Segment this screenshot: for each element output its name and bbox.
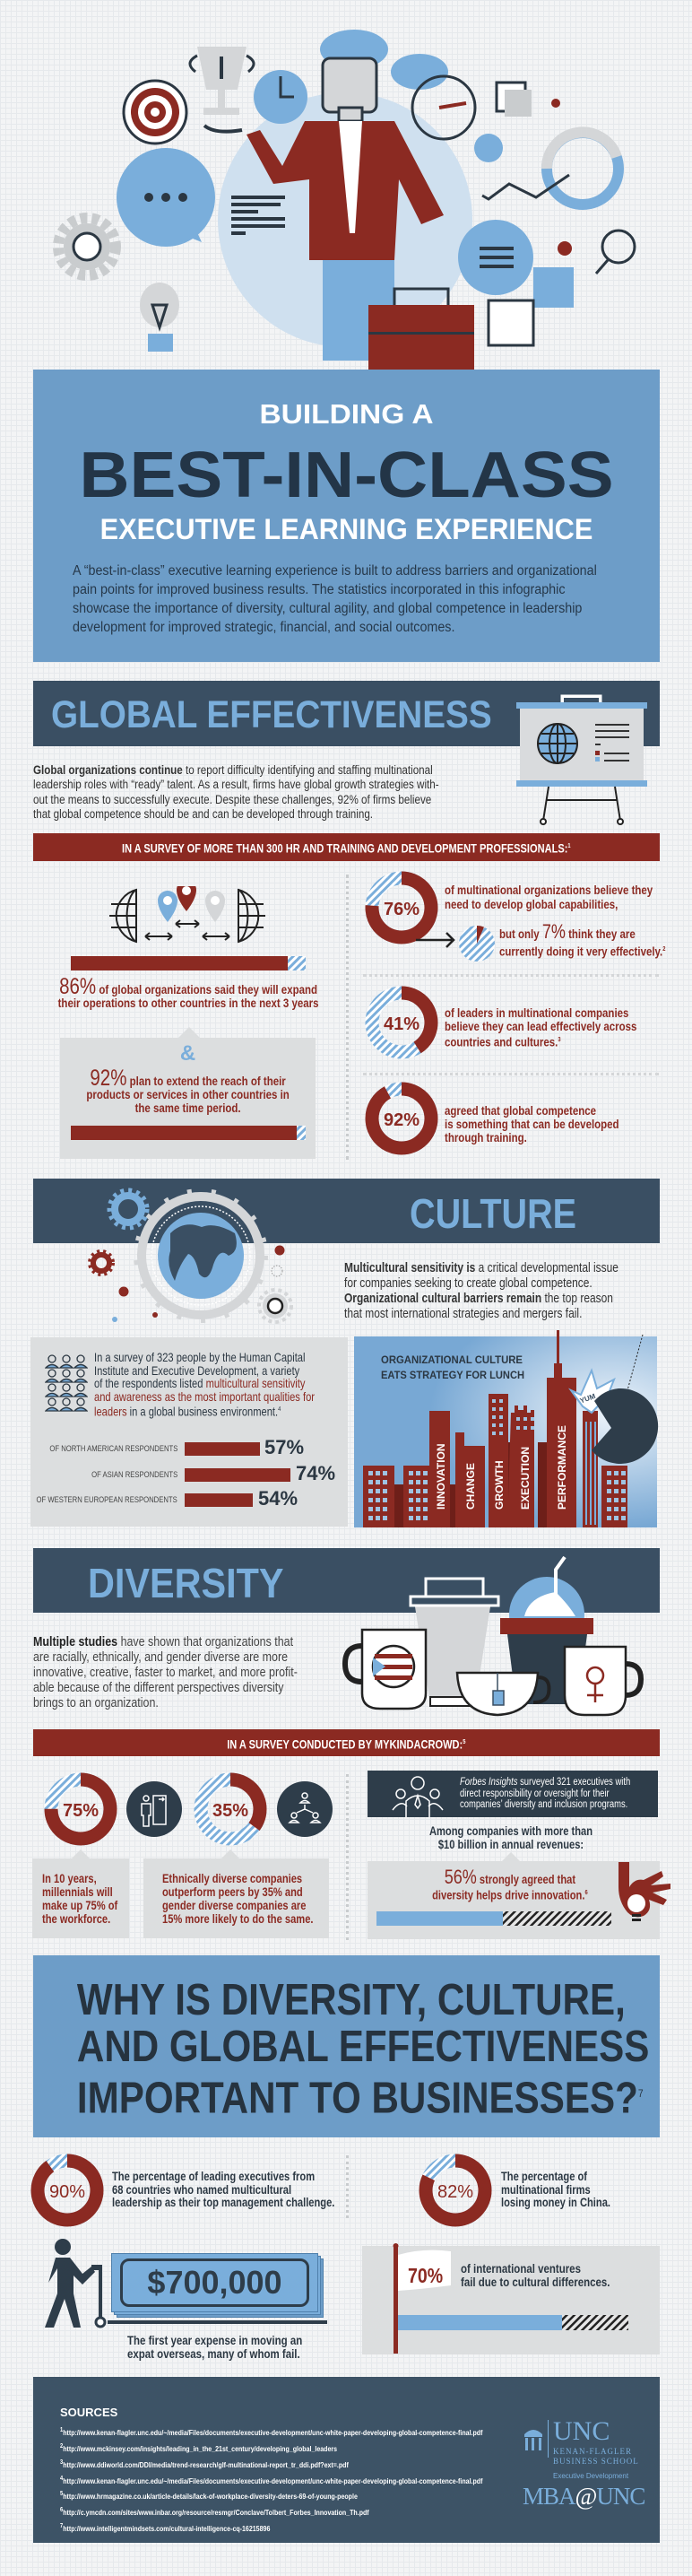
icon: donut chart [474, 132, 618, 205]
money bill [111, 2253, 324, 2318]
header: culture: CULTURE [410, 1190, 576, 1237]
icon: network people [277, 1781, 333, 1837]
panel: 70% ventures: 70% [408, 2264, 443, 2287]
bar chart: respondents [36, 1436, 335, 1510]
stat text: 90%: The percentage of leading executives from [112, 2170, 315, 2183]
panel: sources: 3http://www.ddiworld.com/DDI/media/trend-research/glf-multinational-report_tr_ddi.pdf?ext=.pdf [60, 2459, 349, 2469]
donut: 35%: 35% [212, 1801, 248, 1821]
callout: 92% plan: & [180, 1041, 195, 1066]
panel: forbes insights [368, 1771, 658, 1817]
panel: 56%: diversity helps drive innovation.6 [432, 1889, 588, 1902]
caption: first year expense [127, 2333, 302, 2361]
donut: 35% [194, 1772, 267, 1846]
bar chart: respondents: 74% [296, 1462, 335, 1484]
survey text: leaders in a global business environment.4 [94, 1405, 281, 1419]
donut: 82%: 82% [437, 2182, 473, 2202]
culture intro text: that most international strategies and mergers fail. [344, 1307, 582, 1321]
donut: 76%: 76% [384, 900, 420, 919]
intro paragraph: pain points for improved business results. The statistics incorporated in this infographic [73, 582, 565, 597]
panel: culture eats strategy skyline: EXECUTION [519, 1447, 532, 1510]
logo: UNC Kenan-Flagler: UNC [553, 2416, 610, 2446]
stat text: 82% [501, 2170, 610, 2209]
intro paragraph: development for improved strategic, financial, and social outcomes. [73, 620, 454, 635]
panel: sources: SOURCES [60, 2406, 117, 2419]
donut: 41%: 41% [384, 1014, 420, 1034]
bar chart: respondents: OF NORTH AMERICAN RESPONDENTS [49, 1443, 177, 1453]
logo: UNC Kenan-Flagler: KENAN-FLAGLER [553, 2447, 632, 2456]
icon: globes and pins [109, 886, 265, 944]
panel: why question: IMPORTANT TO BUSINESSES?7 [77, 2074, 644, 2122]
header: global effectiveness: GLOBAL EFFECTIVENESS [51, 693, 492, 736]
briefcase [368, 289, 474, 370]
panel: culture eats strategy skyline: EATS STRATEGY FOR LUNCH [381, 1369, 524, 1381]
panel: culture eats strategy skyline: GROWTH [493, 1460, 506, 1510]
donut: 76% [366, 872, 437, 944]
panel: sources: 6http://c.ymcdn.com/sites/www.inbar.org/resource/resmgr/Conclave/Tolbert_Forbes_Innovation_Th.pdf [60, 2507, 369, 2517]
panel: why question: WHY IS DIVERSITY, CULTURE, [77, 1976, 626, 2024]
donut: 82% [420, 2154, 491, 2226]
panel: 70% ventures: fail due to cultural differences. [461, 2275, 610, 2289]
callout: millennials: In 10 years, [42, 1872, 97, 1885]
intro paragraph: showcase the importance of diversity, cultural agility, and global competence in leadership [73, 601, 582, 616]
panel: 70% ventures [362, 2246, 660, 2354]
icon: square [497, 83, 560, 117]
panel: why question [33, 1955, 660, 2137]
culture intro text: Multicultural sensitivity is a critical developmental issue [344, 1261, 618, 1275]
header: global effectiveness [33, 681, 660, 746]
panel: 56%: 56% strongly agreed that [445, 1866, 575, 1888]
stat text: 90% [112, 2170, 334, 2209]
panel: sources: 7http://www.intelligentmindsets.com/cultural-intelligence-cq-16215896 [60, 2523, 270, 2533]
stat text: 92%: through training. [445, 1130, 527, 1144]
survey banner 2 [33, 1729, 660, 1756]
panel: why question: AND GLOBAL EFFECTIVENESS [77, 2023, 649, 2071]
title panel [33, 370, 660, 662]
global effectiveness intro text: leadership roles with “ready” talent. As a result, firms have global growth strategies with- [33, 778, 439, 792]
bar chart: respondents: 57% [264, 1436, 304, 1458]
callout: ethnically diverse: outperform peers by 35% and [162, 1885, 303, 1899]
header: diversity [33, 1548, 660, 1613]
text lines [231, 196, 285, 235]
stat text: 76%: need to develop global capabilities, [445, 897, 618, 911]
callout: millennials [32, 1858, 129, 1938]
title line 1: BUILDING A [259, 398, 434, 430]
global effectiveness intro text [33, 763, 439, 822]
icon: trophy [190, 47, 254, 115]
stat text: 76%: of multinational organizations believe they [445, 883, 653, 897]
stat text: 41%: countries and cultures.3 [445, 1035, 561, 1049]
intro paragraph [73, 563, 597, 635]
stat text: 7%: currently doing it very effectively.2 [499, 944, 665, 959]
stat text: 92%: agreed that global competence [445, 1103, 596, 1118]
survey text [94, 1351, 315, 1419]
caption: first year expense: expat overseas, many of whom fail. [127, 2346, 300, 2361]
panel: culture eats strategy skyline: INNOVATION [435, 1443, 447, 1510]
text: among companies: $10 billion in annual revenues: [438, 1838, 584, 1851]
diversity intro text: are racially, ethnically, and gender diverse are more [33, 1649, 288, 1665]
icon: target [124, 81, 186, 144]
icon: lightbulb [140, 283, 179, 352]
intro paragraph: A “best-in-class” executive learning experience is built to address barriers and organizational [73, 563, 597, 579]
panel: forbes insights: Forbes Insights surveyed 321 executives with [460, 1777, 630, 1788]
callout: millennials: make up 75% of [42, 1899, 117, 1912]
panel: culture eats strategy skyline: YUM [579, 1392, 597, 1405]
donut: 92% [366, 1082, 437, 1155]
callout: ethnically diverse: 15% more likely to do the same. [162, 1912, 314, 1926]
survey banner 2: IN A SURVEY CONDUCTED BY MYKINDACROWD:5 [227, 1738, 465, 1751]
survey text: Institute and Executive Development, a variety [94, 1363, 299, 1378]
header: culture [33, 1179, 660, 1243]
panel: culture eats strategy skyline [354, 1330, 658, 1527]
callout: 92% plan: 92% plan to extend the reach of their products or services in other countries in the same time period. [86, 1066, 290, 1115]
bar chart: respondents: OF ASIAN RESPONDENTS [91, 1469, 177, 1479]
stat text: 41%: believe they can lead effectively across [445, 1019, 636, 1033]
icon: people grid [45, 1354, 88, 1412]
icon: speech bubble lines [458, 220, 533, 295]
stat text: 41%: of leaders in multinational companies [445, 1005, 628, 1020]
panel: sources: 4http://www.kenan-flagler.unc.edu/~/media/Files/documents/executive-development/unc-white-paper-developing-global-competence-final.pdf [60, 2476, 482, 2485]
survey banner 1 [33, 833, 660, 861]
stat text: 90%: leadership as their top management challenge. [112, 2196, 334, 2209]
panel: 70% ventures: of international ventures [461, 2261, 581, 2276]
icon: puzzle [489, 231, 635, 345]
caption: first year expense: The first year expense in moving an [127, 2333, 302, 2347]
icon: person pushing cart [45, 2239, 327, 2328]
icon: person at door [126, 1781, 182, 1837]
callout: millennials: millennials will [42, 1885, 113, 1899]
survey text: of the respondents listed multicultural sensitivity [94, 1377, 305, 1390]
donut: 75%: 75% [63, 1801, 99, 1821]
text: among companies: Among companies with more than [429, 1824, 593, 1838]
callout: ethnically diverse: Ethnically diverse companies [162, 1872, 302, 1885]
text: among companies [429, 1824, 593, 1851]
stat: 86%: 86% of global organizations said they will expand their operations to other countries in the next 3 years [58, 974, 319, 1010]
panel: 56% [368, 1861, 660, 1939]
diversity intro text: Multiple studies have shown that organizations that [33, 1634, 293, 1649]
panel: sources: 2http://www.mckinsey.com/insights/leading_in_the_21st_century/developing_global_leaders [60, 2443, 337, 2453]
survey banner 1: IN A SURVEY OF MORE THAN 300 HR AND TRAINING AND DEVELOPMENT PROFESSIONALS:1 [122, 841, 571, 856]
global effectiveness intro text: out the means to successfully execute. Despite these challenges, 92% of firms believe [33, 793, 431, 807]
survey text: In a survey of 323 people by the Human Capital [94, 1351, 305, 1364]
callout: ethnically diverse [143, 1858, 329, 1938]
stat text: 7% [499, 920, 665, 959]
global effectiveness intro text: Global organizations continue to report difficulty identifying and staffing multinational [33, 763, 433, 778]
icon: easel [516, 694, 647, 825]
diversity intro text: innovative, creative, faster to market, and more profit- [33, 1665, 298, 1680]
culture intro text: Organizational cultural barriers remain the top reason [344, 1292, 613, 1306]
divider dotted [346, 875, 349, 1160]
hero illustration [53, 30, 636, 370]
callout: millennials: the workforce. [42, 1912, 110, 1926]
title main: BEST-IN-CLASS [79, 439, 614, 511]
panel: forbes insights: companies’ diversity and inclusion programs. [460, 1799, 627, 1810]
donut: 92%: 92% [384, 1110, 420, 1130]
global effectiveness intro text: that global competence should be and can be developed through training. [33, 807, 373, 822]
panel: culture eats strategy skyline: ORGANIZATIONAL CULTURE [381, 1353, 523, 1366]
icon: gears and globe [88, 1188, 293, 1324]
stat text: 82%: multinational firms [501, 2183, 591, 2196]
panel: sources: 1http://www.kenan-flagler.unc.edu/~/media/Files/documents/executive-development/unc-white-paper-developing-global-competence-final.pdf [60, 2427, 482, 2437]
bar: 86% [71, 956, 306, 970]
stat text: 82%: The percentage of [501, 2170, 587, 2183]
donut: 75% [45, 1772, 117, 1846]
bar chart: respondents: OF WESTERN EUROPEAN RESPONDENTS [37, 1494, 177, 1504]
panel: culture eats strategy skyline: PERFORMANCE [556, 1425, 568, 1510]
panel: sources: 5http://www.hrmagazine.co.uk/article-details/lack-of-workplace-diversity-deters-69-of-young-people [60, 2491, 358, 2501]
stat text: 92% [445, 1103, 619, 1144]
logo: UNC Kenan-Flagler [524, 2416, 639, 2480]
title line 3: EXECUTIVE LEARNING EXPERIENCE [100, 513, 593, 545]
stat text: 92%: is something that can be developed [445, 1117, 619, 1131]
panel: forbes insights: direct responsibility or oversight for their [460, 1788, 610, 1799]
icon: clock [254, 70, 307, 124]
diversity intro text: brings to an organization. [33, 1695, 159, 1710]
icon: cloud + gauge [391, 54, 475, 139]
money bill: $700,000 [147, 2264, 282, 2301]
survey text: and awareness as the most important qualities for [94, 1390, 315, 1403]
callout: ethnically diverse: gender diverse companies are [162, 1899, 306, 1912]
callout: 92% plan [60, 1038, 316, 1159]
panel: survey of 323 [30, 1337, 348, 1527]
panel: culture eats strategy skyline: CHANGE [464, 1463, 477, 1510]
icon: hand lightbulb [618, 1862, 670, 1921]
arrow + 7% pie [416, 926, 495, 962]
stat text: 90%: 68 countries who named multicultural [112, 2183, 291, 2196]
icon: gear [58, 218, 116, 275]
stat text: 76% [445, 883, 653, 911]
icon: speech bubble dots [117, 148, 215, 247]
donut: 90% [30, 2154, 104, 2226]
donut: 90%: 90% [49, 2182, 85, 2202]
stat text: 41% [445, 1005, 636, 1049]
logo: UNC Kenan-Flagler: BUSINESS SCHOOL [553, 2457, 639, 2466]
diversity intro text [33, 1634, 298, 1710]
bar chart: respondents: 54% [258, 1487, 298, 1510]
culture intro text [344, 1261, 618, 1321]
panel: sources [33, 2377, 660, 2543]
header: diversity: DIVERSITY [88, 1560, 284, 1606]
diversity intro text: able because of the different perspectives diversity [33, 1680, 283, 1695]
icon: cups [342, 1555, 644, 1717]
donut: 41% [366, 987, 437, 1058]
logo: UNC Kenan-Flagler: Executive Development [553, 2472, 628, 2480]
stat text: 7%: but only 7% think they are [499, 920, 636, 943]
stat text: 82%: losing money in China. [501, 2196, 610, 2209]
logo: MBA@UNC: MBA@UNC [523, 2483, 644, 2510]
man [204, 30, 444, 361]
culture intro text: for companies seeking to create global competence. [344, 1276, 593, 1291]
